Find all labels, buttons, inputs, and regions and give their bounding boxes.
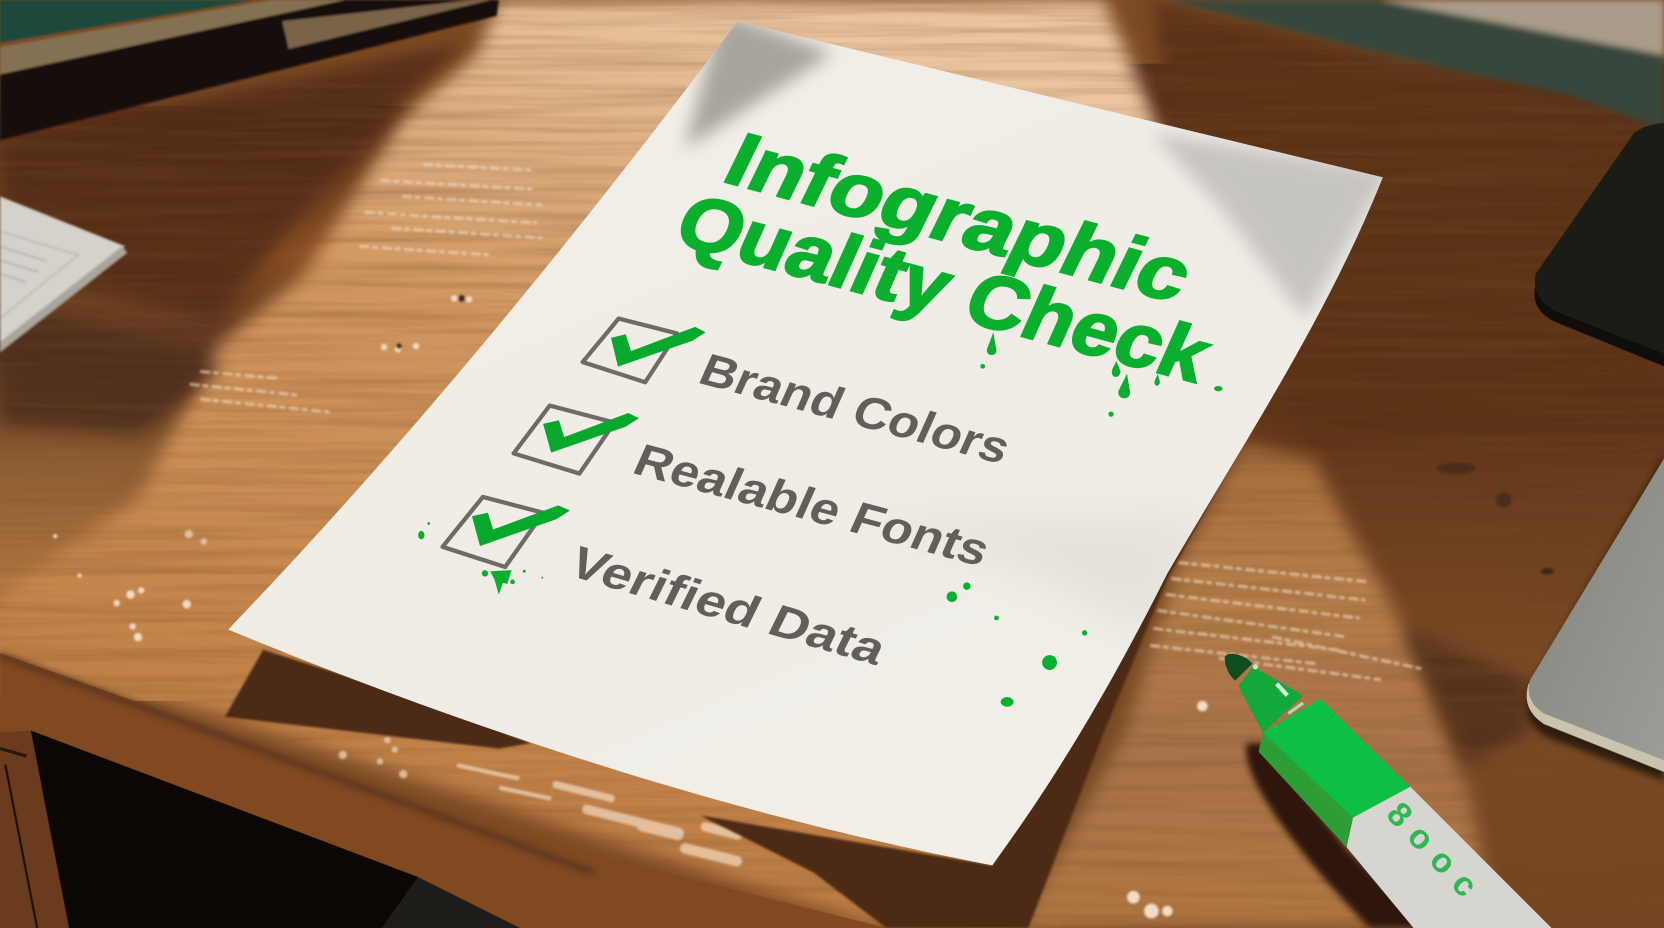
marker label: 8ooc	[1379, 795, 1493, 913]
item 3: checkbox with tick	[443, 497, 568, 567]
item 1 label: Brand Colors	[692, 344, 1019, 473]
wood knots and specks	[53, 295, 1554, 918]
item 3 label: Verified Data	[561, 536, 896, 674]
sparkles near the desk edge	[339, 737, 743, 868]
notebook, left	[0, 196, 127, 353]
phone, right	[1534, 123, 1664, 366]
title: Infographic	[712, 118, 1206, 318]
green marker	[1225, 654, 1552, 928]
item 1: checkbox with tick	[583, 319, 704, 382]
sunlit wet sparkle patches	[191, 165, 1422, 680]
item 2 label: Realable Fonts	[626, 434, 998, 576]
tablet or laptop, right	[1526, 457, 1664, 780]
paper sheet	[228, 11, 1390, 865]
desk front edge and cabinet	[0, 653, 886, 928]
green ink drips and splatter	[418, 332, 1223, 707]
checklist	[443, 319, 1019, 674]
title: Quality Check	[664, 179, 1224, 398]
item 2: checkbox with tick	[514, 406, 637, 474]
wall corner, top right	[1104, 0, 1664, 130]
shadow under paper	[225, 435, 1242, 928]
book stack, top left	[0, 0, 499, 140]
